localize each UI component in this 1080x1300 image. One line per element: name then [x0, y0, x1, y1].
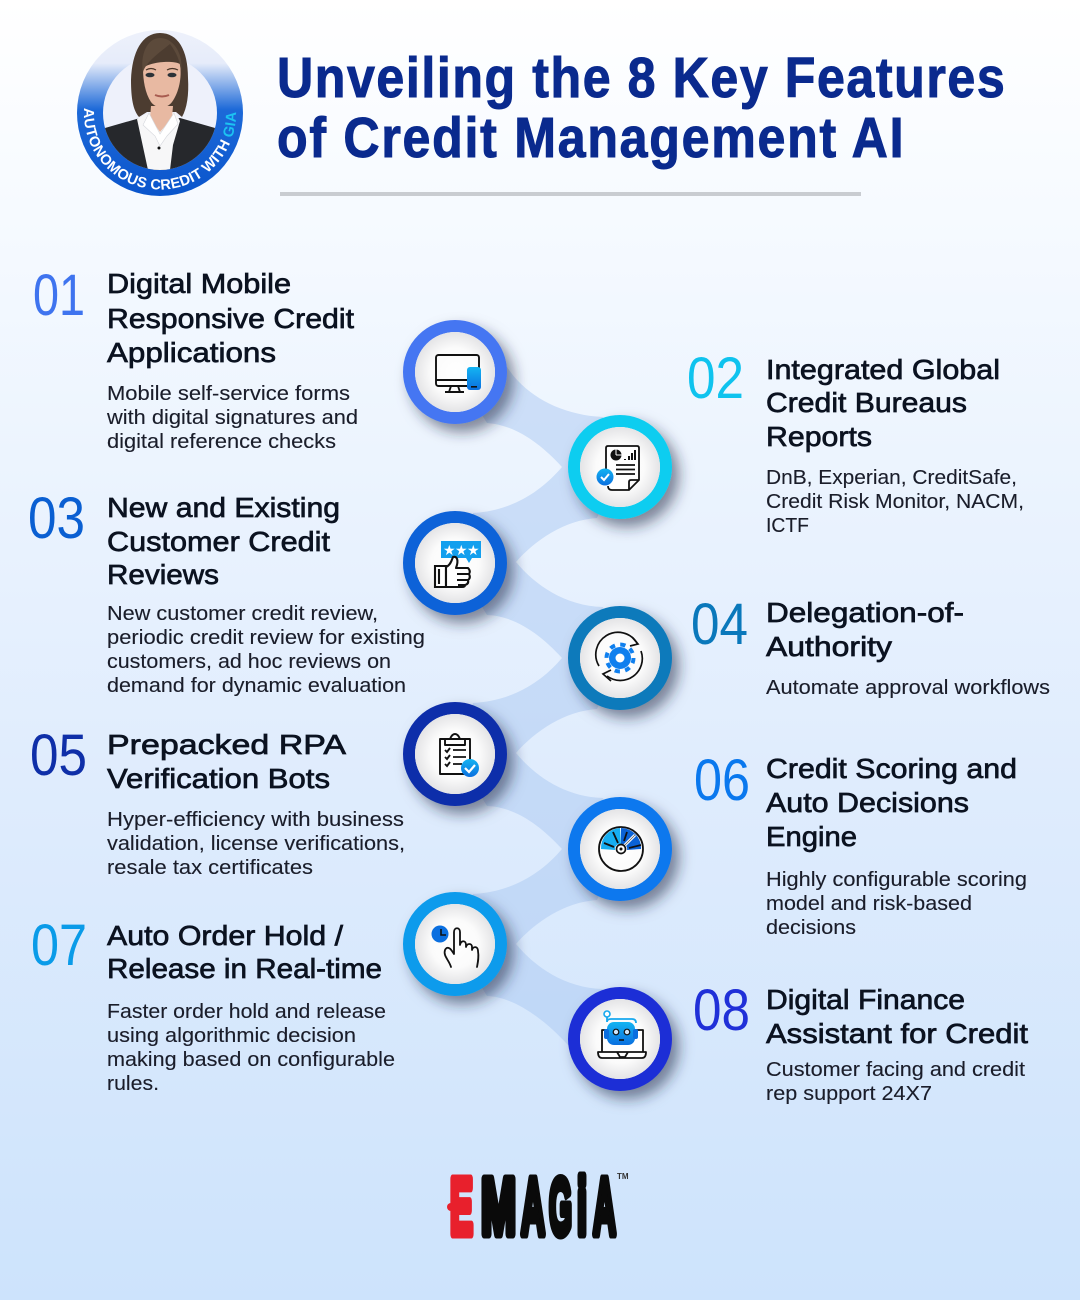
- feature 06: 06: [694, 748, 750, 813]
- feature 06: Highly configurable scoring: [766, 868, 1027, 891]
- feature 07: 07: [31, 913, 87, 978]
- icon: star rating thumbs up: ★: [443, 543, 456, 559]
- feature 03: Customer Credit: [107, 526, 330, 557]
- feature 03: New and Existing: [107, 492, 340, 523]
- feature 07: making based on configurable: [107, 1048, 395, 1071]
- feature 04: Delegation-of-: [766, 597, 964, 628]
- feature 08: Assistant for Credit: [766, 1018, 1028, 1049]
- feature 01: 01: [33, 263, 85, 328]
- feature 02: Credit Bureaus: [766, 387, 967, 418]
- feature 01: digital reference checks: [107, 430, 336, 453]
- logo: [447, 1162, 629, 1251]
- icon: star rating thumbs up: ★: [467, 543, 480, 559]
- feature 05: Prepacked RPA: [107, 729, 346, 760]
- feature 07: Faster order hold and release: [107, 1000, 386, 1023]
- feature 02: [687, 346, 1024, 537]
- icon: gear with sync arrows: [574, 612, 666, 704]
- feature 08: Digital Finance: [766, 984, 965, 1015]
- feature 03: customers, ad hoc reviews on: [107, 650, 391, 673]
- logo: A: [521, 1162, 545, 1251]
- feature 05: validation, license verifications,: [107, 832, 405, 855]
- feature 02: 02: [687, 346, 744, 411]
- feature 06: model and risk-based: [766, 892, 972, 915]
- feature 03: periodic credit review for existing: [107, 626, 425, 649]
- icon: score gauge: [574, 803, 666, 895]
- feature 02: Integrated Global: [766, 354, 1000, 385]
- feature 06: Credit Scoring and: [766, 753, 1017, 784]
- feature 01: Responsive Credit: [107, 303, 354, 334]
- feature 04: Authority: [766, 631, 892, 662]
- feature 07: Auto Order Hold /: [107, 920, 343, 951]
- feature 01: Digital Mobile: [107, 268, 291, 299]
- icon: credit report: [574, 421, 666, 513]
- feature 03: [28, 486, 425, 697]
- feature 07: rules.: [107, 1072, 159, 1095]
- feature 08: 08: [693, 978, 750, 1043]
- title: Unveiling the 8 Key Features: [277, 46, 1005, 110]
- feature 01: [33, 263, 358, 453]
- avatar badge: [77, 30, 243, 196]
- icon: checklist clipboard: [409, 708, 501, 800]
- icon: star rating thumbs up: [409, 517, 501, 609]
- feature 05: 05: [30, 723, 87, 788]
- logo: E: [450, 1162, 473, 1251]
- logo: i: [577, 1162, 587, 1251]
- icon: monitor and phone: [409, 326, 501, 418]
- avatar badge: AUTONOMOUS CREDIT WITH GIA: [84, 108, 236, 190]
- feature 05: Verification Bots: [107, 763, 330, 794]
- feature 08: rep support 24X7: [766, 1082, 932, 1105]
- icon: robot on laptop: [574, 993, 666, 1085]
- logo: G: [549, 1162, 572, 1251]
- icon: clock and hand: [409, 898, 501, 990]
- icon: star rating thumbs up: ★: [455, 543, 468, 559]
- feature 02: Credit Risk Monitor, NACM,: [766, 490, 1024, 513]
- feature 03: demand for dynamic evaluation: [107, 674, 406, 697]
- title: [277, 46, 1005, 170]
- feature 04: Automate approval workflows: [766, 676, 1050, 699]
- feature 04: 04: [691, 592, 748, 657]
- title: of Credit Management AI: [277, 106, 904, 170]
- feature 08: Customer facing and credit: [766, 1058, 1025, 1081]
- feature 03: New customer credit review,: [107, 602, 378, 625]
- logo: A: [593, 1162, 616, 1251]
- feature 08: [693, 978, 1028, 1105]
- feature 02: Reports: [766, 421, 872, 452]
- connector ribbon: [455, 367, 620, 1045]
- feature 07: [31, 913, 395, 1095]
- feature 04: [691, 592, 1050, 699]
- feature 05: resale tax certificates: [107, 856, 313, 879]
- feature 06: [694, 748, 1027, 939]
- feature 01: Mobile self-service forms: [107, 382, 350, 405]
- feature 06: Auto Decisions: [766, 787, 969, 818]
- feature 06: Engine: [766, 821, 857, 852]
- feature 07: Release in Real-time: [107, 953, 382, 984]
- feature 07: using algorithmic decision: [107, 1024, 356, 1047]
- feature 03: Reviews: [107, 559, 219, 590]
- feature 05: [30, 723, 405, 879]
- logo: TM: [617, 1172, 629, 1181]
- feature 06: decisions: [766, 916, 856, 939]
- feature 01: with digital signatures and: [106, 406, 358, 429]
- feature 02: ICTF: [766, 514, 809, 537]
- feature 01: Applications: [107, 337, 276, 368]
- feature 02: DnB, Experian, CreditSafe,: [766, 466, 1017, 489]
- feature 03: 03: [28, 486, 85, 551]
- feature 05: Hyper-efficiency with business: [107, 808, 404, 831]
- logo: M: [481, 1162, 516, 1251]
